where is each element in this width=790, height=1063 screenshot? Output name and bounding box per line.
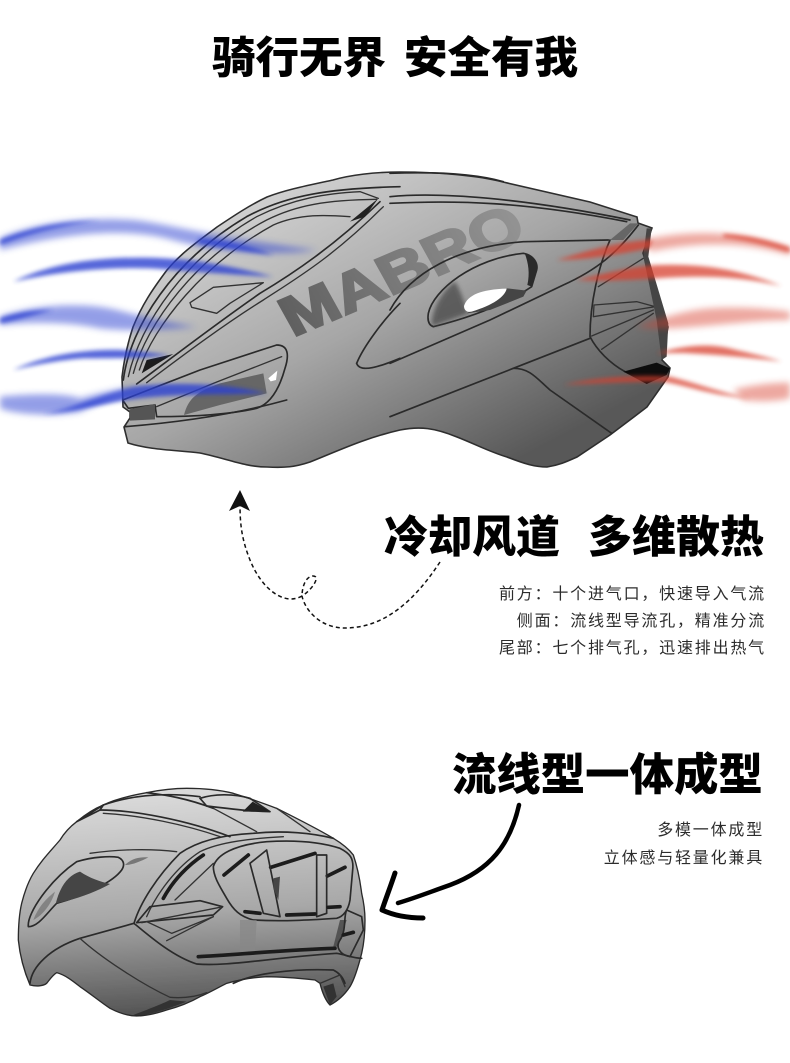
heading: cooling channels: 冷却风道: [384, 513, 560, 562]
heading: streamlined one-piece: 流线型一体成型: [452, 750, 763, 800]
text block: one-piece details: 多模一体成型: [657, 821, 764, 839]
side vent: [28, 850, 177, 927]
text block: cooling details: 尾部：七个排气孔，迅速排出热气: [499, 639, 766, 657]
airflow: cool air (blue): [0, 219, 317, 415]
text block: cooling details: 侧面：流线型导流孔，精准分流: [517, 612, 766, 630]
helmet: rear three-quarter view: [18, 788, 365, 1016]
text block: one-piece details: [604, 821, 764, 867]
top vents and ribs: [77, 793, 310, 837]
text block: cooling details: 前方：十个进气口，快速导入气流: [499, 585, 766, 603]
dashed curved arrow: [229, 490, 440, 628]
arrow: hand-drawn pointing to helmet: [382, 805, 519, 918]
airflow: hot air (red): [557, 233, 790, 401]
heading: cooling channels: 多维散热: [588, 513, 764, 562]
logo: MABRO: MABRO: [268, 192, 534, 348]
text block: one-piece details: 立体感与轻量化兼具: [604, 849, 764, 867]
title: 骑行无界: [212, 35, 386, 83]
helmet shell: [122, 172, 670, 467]
front vents and ribs: [123, 187, 400, 427]
helmet shell: [18, 788, 365, 1016]
lower band and tail lines: [30, 910, 363, 1016]
helmet: side view with airflow: [0, 172, 790, 467]
rear frame: [134, 832, 353, 952]
rear vents and ribs: [390, 173, 670, 433]
text block: cooling details: [499, 585, 766, 657]
title: 安全有我: [404, 35, 578, 83]
